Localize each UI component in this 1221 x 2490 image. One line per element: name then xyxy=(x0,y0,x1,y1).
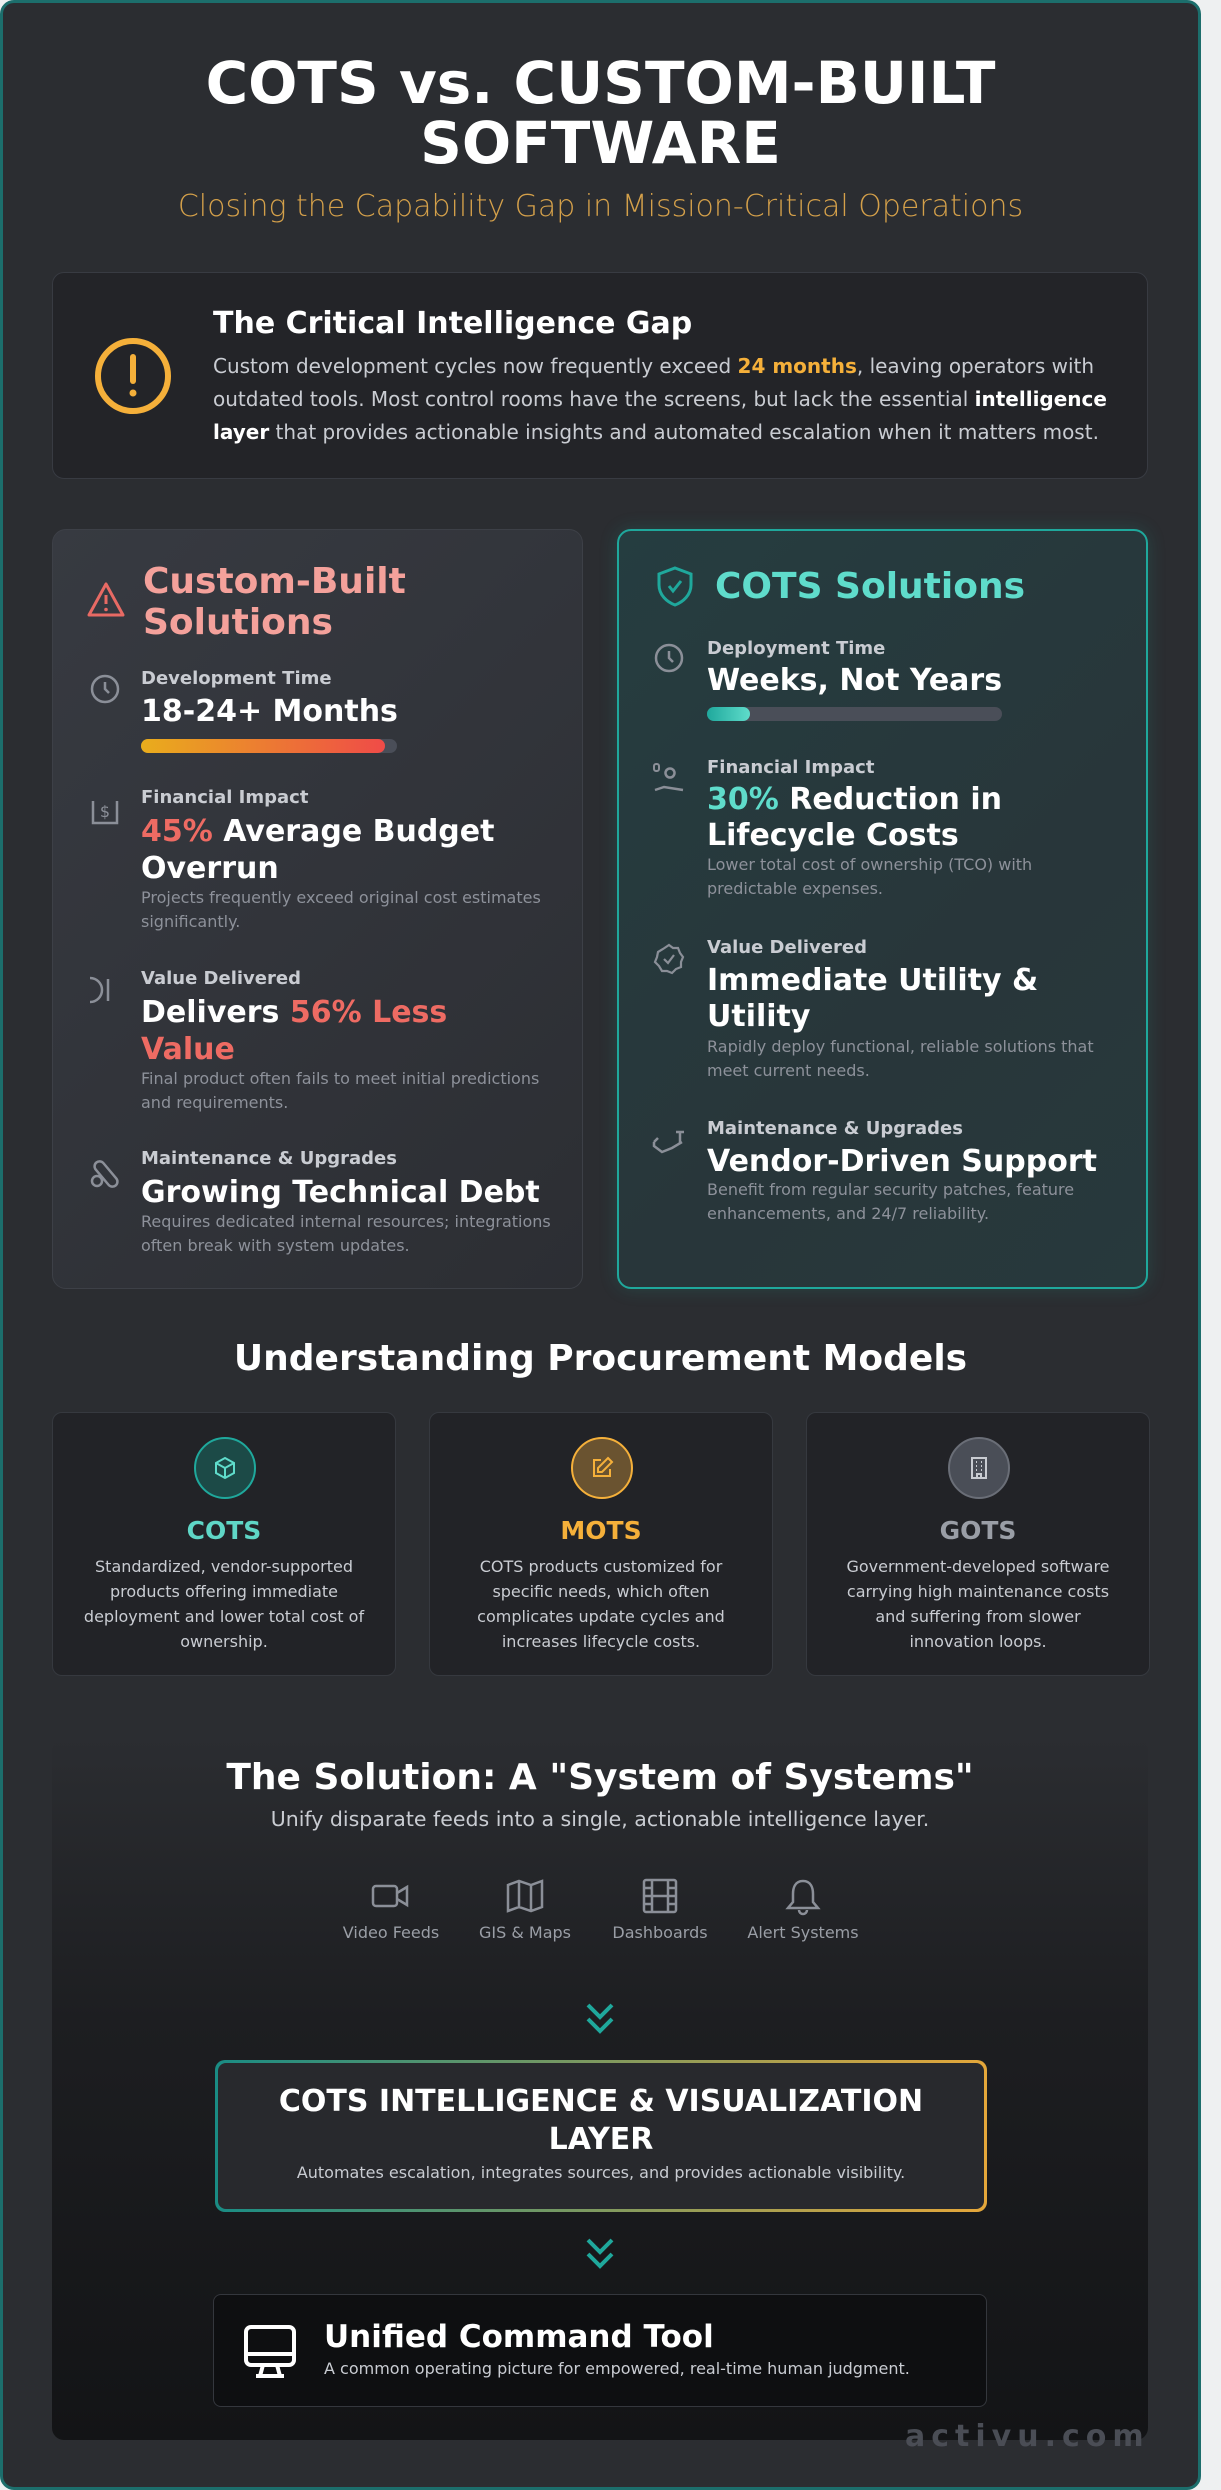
item: value delivered: Value xyxy=(141,1032,235,1067)
item: financial impact: predictable expenses. xyxy=(707,879,883,898)
item: financial impact: significantly. xyxy=(141,912,240,931)
heading: custom-built: Custom-Built xyxy=(143,561,406,602)
item: financial impact: Lower total cost of ownership (TCO) with xyxy=(707,855,1032,874)
item: financial impact: Financial Impact xyxy=(707,757,874,778)
icon: edit xyxy=(571,1437,633,1499)
item: value delivered: Rapidly deploy functional, reliable solutions that xyxy=(707,1037,1094,1056)
box: intelligence layer xyxy=(215,2060,987,2212)
item: financial impact: 45% Average Budget xyxy=(141,814,494,849)
arrow: down chevron 1 xyxy=(586,2004,614,2034)
icon: building xyxy=(948,1437,1010,1499)
item: maintenance: often break with system updates. xyxy=(141,1236,410,1255)
item: financial impact: Projects frequently exceed original cost estimates xyxy=(141,888,541,907)
heading: custom-built: Solutions xyxy=(143,602,333,643)
subtitle: Closing the Capability Gap in Mission-Critical Operations xyxy=(178,189,1023,224)
heading: The Critical Intelligence Gap xyxy=(213,306,692,341)
item: financial impact: 30% Reduction in xyxy=(707,782,1002,817)
item: deployment time xyxy=(707,638,1002,721)
item: deployment time: Weeks, Not Years xyxy=(707,663,1002,698)
item: value delivered xyxy=(141,968,539,1112)
item: maintenance: Requires dedicated internal resources; integrations xyxy=(141,1212,551,1231)
card: GOTS: and suffering from slower xyxy=(875,1607,1081,1626)
card: MOTS: increases lifecycle costs. xyxy=(502,1632,700,1651)
icon: video feeds: Video Feeds xyxy=(343,1923,439,1942)
arrow: down chevron 2 xyxy=(586,2238,614,2269)
heading: custom-built xyxy=(143,561,406,643)
item: development time: Development Time xyxy=(141,668,332,689)
title: COTS vs. CUSTOM-BUILT xyxy=(206,49,995,117)
item: value delivered: Immediate Utility & xyxy=(707,963,1038,998)
icon: dashboards: Dashboards xyxy=(612,1923,708,1942)
item: value delivered: meet current needs. xyxy=(707,1061,870,1080)
panel: intelligence gap xyxy=(52,272,1148,479)
item: maintenance: Maintenance & Upgrades xyxy=(707,1118,963,1139)
watermark: activu.com xyxy=(905,2419,1150,2454)
card: GOTS: innovation loops. xyxy=(909,1632,1047,1651)
icon: shield xyxy=(658,566,692,606)
icon: money: $ xyxy=(100,802,110,821)
item: development time xyxy=(141,668,398,753)
card: COTS: products offering immediate xyxy=(110,1582,338,1601)
item: maintenance: Vendor-Driven Support xyxy=(707,1144,1097,1179)
item: financial impact: Financial Impact xyxy=(141,787,308,808)
card: COTS: deployment and lower total cost of xyxy=(84,1607,364,1626)
card: GOTS: Government-developed software xyxy=(846,1557,1110,1576)
box: intelligence layer: LAYER xyxy=(549,2122,653,2157)
item: maintenance xyxy=(141,1148,551,1255)
box: unified command tool: Unified Command Tool xyxy=(324,2319,714,2355)
title xyxy=(206,49,996,177)
icon: clock xyxy=(90,674,120,704)
item: maintenance: Maintenance & Upgrades xyxy=(141,1148,397,1169)
card: COTS: Standardized, vendor-supported xyxy=(95,1557,353,1576)
item: maintenance: Benefit from regular security patches, feature xyxy=(707,1180,1074,1199)
box: intelligence layer: Automates escalation, integrates sources, and provides actionable visibility. xyxy=(297,2163,905,2182)
item: value delivered xyxy=(707,937,1094,1080)
icon: alert systems xyxy=(747,1880,859,1942)
box: intelligence layer: COTS INTELLIGENCE & VISUALIZATION xyxy=(279,2084,923,2119)
icon: warning triangle xyxy=(88,582,124,616)
icon: warning circle xyxy=(95,338,171,414)
icon: value xyxy=(90,976,110,1004)
item: development time: 18-24+ Months xyxy=(141,694,398,729)
card: MOTS: specific needs, which often xyxy=(492,1582,710,1601)
body text xyxy=(213,354,1107,444)
card: GOTS xyxy=(806,1412,1150,1676)
item: value delivered: Final product often fails to meet initial predictions xyxy=(141,1069,539,1088)
card: COTS xyxy=(52,1412,396,1676)
item: value delivered: Delivers 56% Less xyxy=(141,995,447,1030)
icon: badge check xyxy=(654,944,684,974)
card: MOTS: complicates update cycles and xyxy=(477,1607,725,1626)
panel: solution xyxy=(52,1738,1148,2440)
panel: custom-built xyxy=(52,529,583,1289)
panel: COTS solutions xyxy=(617,529,1148,1289)
card: MOTS: COTS products customized for xyxy=(480,1557,722,1576)
icon: money xyxy=(92,801,118,824)
icon: GIS maps: GIS & Maps xyxy=(479,1923,571,1942)
card: GOTS: GOTS xyxy=(940,1516,1016,1545)
icon: handshake xyxy=(652,1130,684,1154)
icon: cube xyxy=(194,1437,256,1499)
heading: procurement models: Understanding Procurement Models xyxy=(234,1338,967,1379)
item: financial impact: Lifecycle Costs xyxy=(707,818,959,853)
icon: video feeds xyxy=(342,1884,439,1942)
icon: dashboards xyxy=(612,1878,708,1942)
heading: COTS solutions: COTS Solutions xyxy=(715,566,1025,607)
title: SOFTWARE xyxy=(420,109,781,177)
item: value delivered: and requirements. xyxy=(141,1093,288,1112)
card: MOTS: MOTS xyxy=(560,1516,642,1545)
item: value delivered: Value Delivered xyxy=(141,968,301,989)
item: deployment time: Deployment Time xyxy=(707,638,885,659)
card: COTS: COTS xyxy=(187,1516,261,1545)
item: maintenance: Growing Technical Debt xyxy=(141,1175,540,1210)
body text: Custom development cycles now frequently exceed 24 months, leaving operators with xyxy=(213,354,1094,378)
box: unified command tool: A common operating picture for empowered, real-time human judgment. xyxy=(324,2359,910,2378)
item: financial impact xyxy=(141,787,541,931)
card: MOTS xyxy=(429,1412,773,1676)
body text: layer that provides actionable insights and automated escalation when it matters most. xyxy=(213,420,1099,444)
item: maintenance: enhancements, and 24/7 reliability. xyxy=(707,1204,989,1223)
icon: GIS maps xyxy=(479,1879,571,1942)
icon: clock xyxy=(654,644,684,672)
icon: monitor xyxy=(244,2325,296,2378)
heading: solution: The Solution: A "System of Systems" xyxy=(226,1757,974,1798)
item: maintenance xyxy=(707,1118,1097,1223)
item: value delivered: Value Delivered xyxy=(707,937,867,958)
body text: outdated tools. Most control rooms have the screens, but lack the essential intelligence xyxy=(213,387,1107,411)
subtitle: solution: Unify disparate feeds into a single, actionable intelligence layer. xyxy=(271,1807,929,1831)
icon: alert systems: Alert Systems xyxy=(747,1923,859,1942)
box: unified command tool xyxy=(213,2294,987,2407)
item: financial impact: Overrun xyxy=(141,851,279,886)
card: GOTS: carrying high maintenance costs xyxy=(847,1582,1109,1601)
item: financial impact xyxy=(707,757,1032,898)
card: COTS: ownership. xyxy=(180,1632,268,1651)
icon: wrench xyxy=(90,1160,119,1188)
icon: coins xyxy=(653,763,684,792)
item: value delivered: Utility xyxy=(707,999,810,1034)
